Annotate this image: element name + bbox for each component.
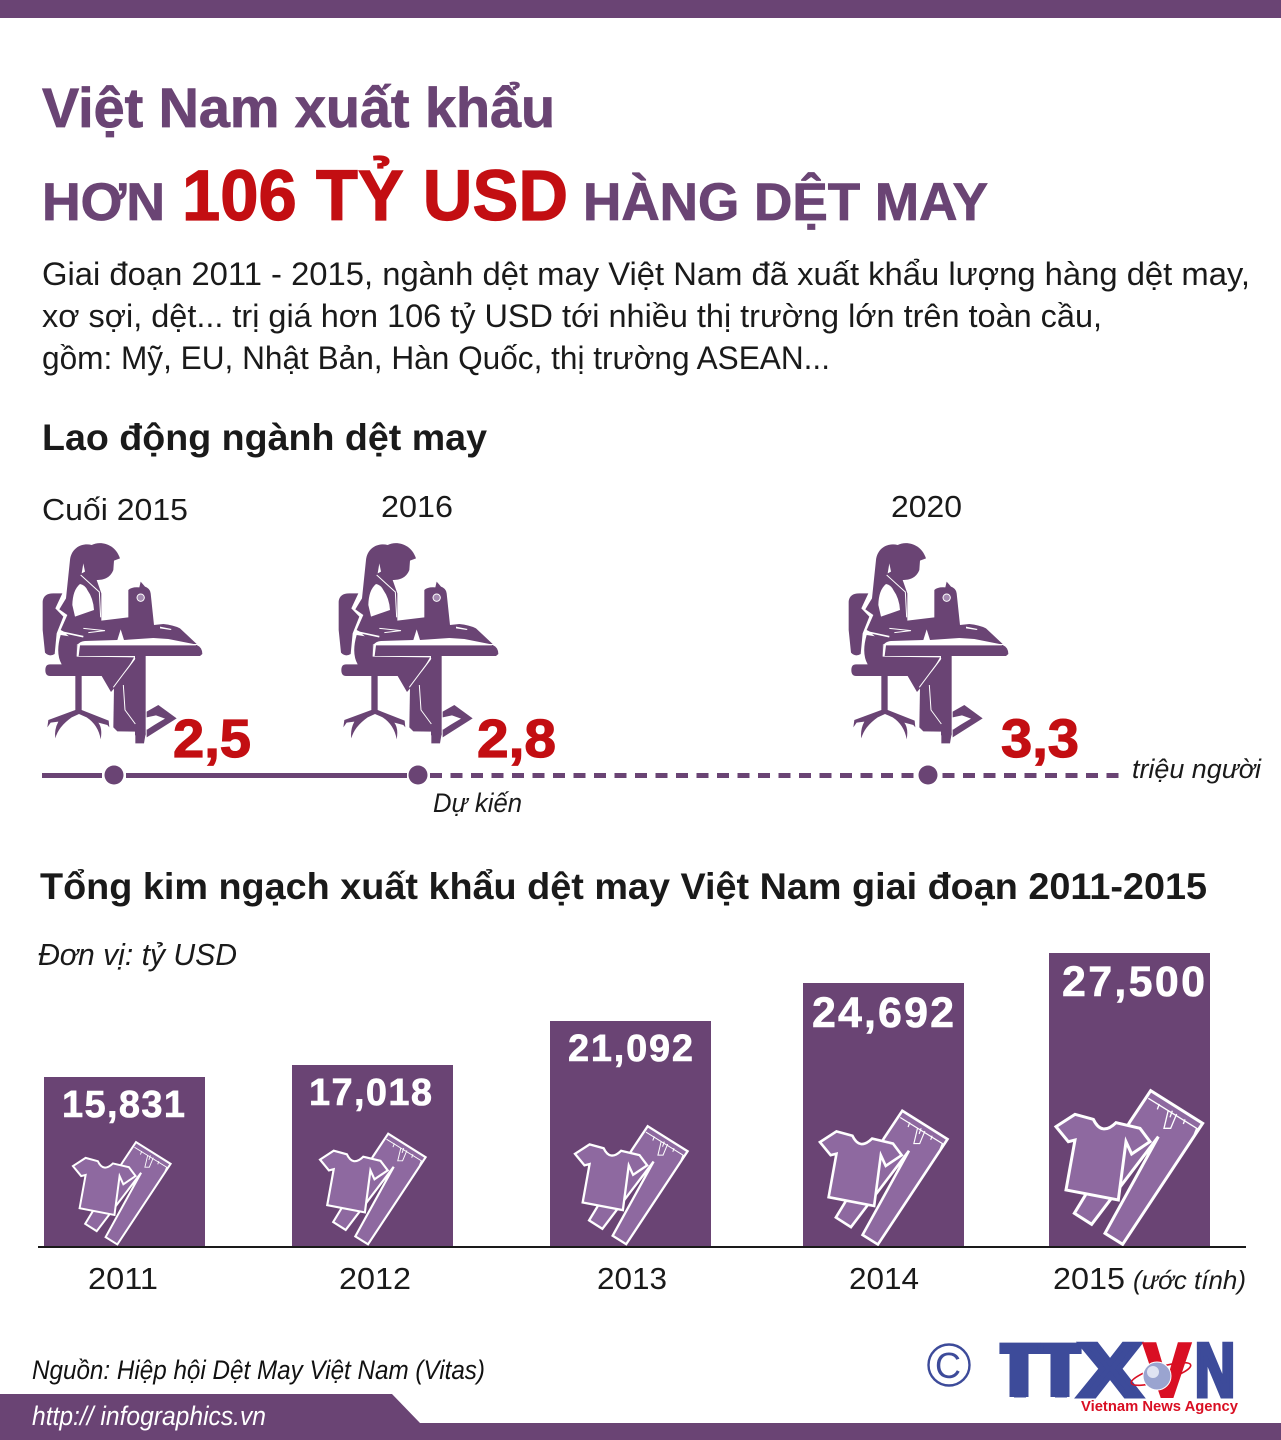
bar 2015: (ước tính) — [1133, 1265, 1246, 1295]
label: 2016: 2016 — [381, 489, 453, 524]
intro line 2: xơ sợi, dệt... trị giá hơn 106 tỷ USD tới nhiều thị trường lớn trên toàn cầu, — [42, 298, 1102, 334]
intro paragraph — [42, 256, 1250, 376]
bar 2011: 2011 — [88, 1261, 158, 1296]
label: Cuối 2015: Cuối 2015 — [42, 492, 188, 527]
bar 2011 — [44, 1077, 205, 1296]
chart unit: Đơn vị: tỷ USD — [38, 937, 237, 972]
copyright icon — [928, 1344, 970, 1386]
bar 2015: 27,500 — [1062, 958, 1205, 1006]
title: HƠN: HƠN — [42, 173, 165, 232]
timeline dot 2020 — [918, 766, 938, 784]
bar 2012: 2012 — [339, 1261, 411, 1296]
icon: worker 2015 — [43, 543, 202, 743]
bar chart — [38, 953, 1246, 1296]
bar 2012 — [292, 1065, 453, 1296]
source note: Nguồn: Hiệp hội Dệt May Việt Nam (Vitas) — [32, 1355, 485, 1385]
bar 2014: 24,692 — [812, 989, 954, 1037]
logo: TTXVN: N — [1195, 1328, 1235, 1412]
logo: TTXVN: X — [1079, 1328, 1141, 1412]
bar 2013: 21,092 — [568, 1028, 693, 1070]
value 2,5: 2,5 — [173, 709, 251, 769]
title: 106 TỶ USD: 106 TỶ USD — [182, 157, 568, 236]
bar 2012: 17,018 — [309, 1072, 432, 1114]
icon: worker 2020 — [849, 543, 1008, 743]
forecast label: Dự kiến — [433, 788, 522, 818]
logo tagline: Vietnam News Agency — [1081, 1398, 1239, 1415]
copyright icon: C — [935, 1345, 961, 1386]
bar 2013 — [550, 1021, 711, 1296]
timeline dot 2015 — [104, 766, 124, 784]
heading: labour: Lao động ngành dệt may — [42, 417, 487, 458]
footer band — [0, 1394, 1281, 1440]
value 2,8: 2,8 — [477, 709, 556, 769]
logo: TTXVN: T — [1041, 1328, 1081, 1412]
bar 2013: 2013 — [597, 1261, 667, 1296]
title line 2 — [42, 157, 988, 236]
intro line 1: Giai đoạn 2011 - 2015, ngành dệt may Việt Nam đã xuất khẩu lượng hàng dệt may, — [42, 256, 1250, 292]
chart axis — [38, 1246, 1246, 1248]
title: HÀNG DỆT MAY: HÀNG DỆT MAY — [583, 171, 988, 232]
heading: export turnover: Tổng kim ngạch xuất khẩu dệt may Việt Nam giai đoạn 2011-2015 — [40, 866, 1207, 907]
icon: worker 2016 — [339, 543, 498, 743]
value 3,3: 3,3 — [1001, 709, 1079, 769]
title line 1: Việt Nam xuất khẩu — [42, 76, 555, 139]
bar 2015 — [1049, 953, 1246, 1296]
logo: TTXVN — [1000, 1328, 1235, 1412]
logo: TTXVN: V — [1144, 1328, 1190, 1412]
bar 2014 — [803, 983, 964, 1296]
bar 2015: 2015 — [1053, 1261, 1125, 1296]
timeline line — [42, 773, 1125, 778]
top purple band — [0, 0, 1281, 18]
intro line 3: gồm: Mỹ, EU, Nhật Bản, Hàn Quốc, thị trường ASEAN... — [42, 340, 830, 376]
logo: TTXVN: T — [1000, 1328, 1040, 1412]
website: http:// infographics.vn — [32, 1401, 266, 1431]
label: 2020: 2020 — [891, 489, 962, 524]
labour timeline — [42, 489, 1262, 818]
unit label: triệu người — [1132, 754, 1262, 784]
bar 2014: 2014 — [849, 1261, 919, 1296]
timeline dot 2016 — [408, 766, 428, 784]
bar 2011: 15,831 — [62, 1084, 185, 1126]
